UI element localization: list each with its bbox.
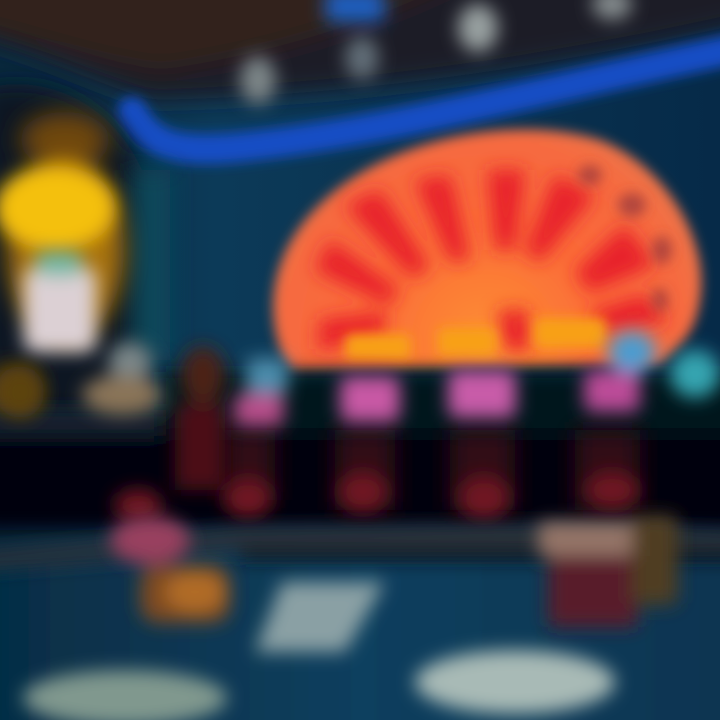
ceiling lights — [240, 0, 632, 104]
machine bodies — [225, 430, 640, 510]
left dark arch — [0, 84, 170, 420]
wheel red rays — [315, 170, 668, 350]
lamp glow — [0, 112, 124, 420]
lower red glows — [114, 472, 638, 521]
floor — [0, 562, 720, 720]
roulette wheel — [273, 129, 701, 372]
lamp yellow core — [0, 166, 115, 250]
blue ceiling band — [132, 48, 720, 149]
screens — [234, 331, 720, 426]
grey ledge — [0, 524, 720, 570]
wheel yellow lights — [345, 318, 606, 360]
wheel disc — [273, 129, 701, 372]
left lamp — [0, 112, 124, 420]
left chips stack — [110, 516, 230, 623]
machine tops left — [0, 342, 225, 490]
slot machines row — [0, 331, 720, 521]
floor cards — [23, 582, 615, 720]
wheel outer dark pockets — [578, 165, 672, 312]
white panel — [24, 252, 96, 352]
right chips box — [538, 515, 678, 627]
ceiling — [0, 0, 720, 100]
dark counter band — [0, 372, 720, 530]
